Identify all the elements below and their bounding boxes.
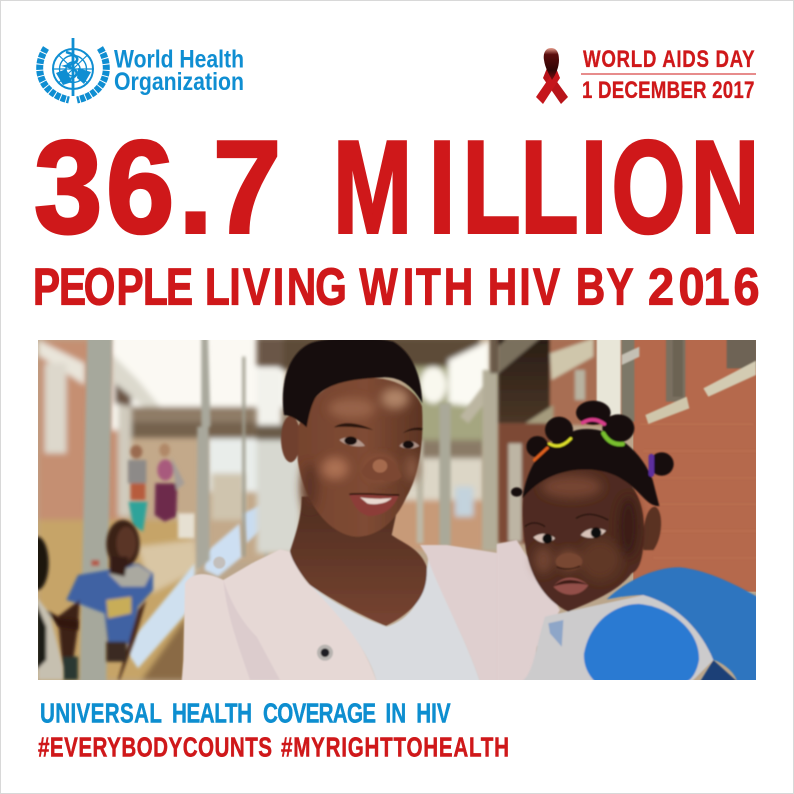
face highlights — [302, 388, 418, 510]
campaign line: UNIVERSAL — [40, 699, 162, 729]
hair puffs — [511, 401, 674, 497]
subheading: PEOPLE LIVING WITH HIV BY — [33, 258, 634, 316]
hair — [523, 429, 659, 506]
organization name: Organization — [114, 68, 244, 96]
face highlights — [534, 475, 638, 580]
neck and chest — [290, 497, 427, 626]
nose — [366, 457, 401, 480]
child — [497, 401, 758, 682]
hair ties — [534, 420, 651, 474]
photo background: left courtyard — [26, 333, 288, 683]
dark fold under hood — [700, 660, 737, 682]
photo background: central passage — [257, 337, 501, 553]
campaign line: HIV — [416, 699, 451, 729]
campaign line — [40, 699, 451, 729]
eyebrows, eyes — [334, 423, 423, 449]
campaign line: IN — [386, 699, 406, 729]
organization name: World Health — [114, 46, 244, 74]
face — [298, 378, 422, 537]
mouth — [349, 494, 398, 516]
face — [523, 463, 644, 612]
jacket: right side — [420, 545, 540, 682]
mother — [182, 338, 540, 682]
organization name — [114, 46, 244, 96]
photo: mother and child — [26, 333, 758, 683]
mother's jacket at child's back — [496, 540, 560, 650]
campaign line: HEALTH — [172, 699, 252, 729]
ear — [281, 416, 300, 462]
headline number: MILLION — [333, 114, 759, 261]
icon: red ribbon — [536, 48, 568, 104]
sweater print — [548, 620, 563, 647]
jacket snaps — [213, 557, 333, 661]
eyes — [525, 514, 608, 544]
jacket: fold details — [225, 588, 278, 680]
event label: World AIDS Day — [581, 46, 756, 104]
blue hood — [607, 567, 758, 682]
hashtags — [38, 733, 509, 763]
blurred boy — [58, 520, 153, 680]
hair — [283, 338, 422, 427]
jacket: left side — [182, 549, 377, 682]
headline number — [34, 114, 759, 261]
shirt — [310, 553, 480, 682]
subheading: 2016 — [648, 258, 760, 316]
photo background: brick building — [498, 338, 757, 592]
grey sweater — [522, 595, 713, 682]
blue sleeve — [584, 604, 699, 682]
nose and mouth — [553, 553, 588, 595]
ear — [643, 507, 661, 550]
hashtags: #MYRIGHTTOHEALTH — [281, 733, 509, 763]
blurred child at left edge — [38, 534, 80, 680]
event label: World AIDS Day: WORLD AIDS DAY — [583, 46, 755, 73]
icon: WHO emblem — [40, 38, 106, 100]
event label: World AIDS Day: 1 DECEMBER 2017 — [582, 77, 754, 104]
campaign line: COVERAGE — [263, 699, 376, 729]
hashtags: #EVERYBODYCOUNTS — [38, 733, 272, 763]
headline number: 36.7 — [34, 114, 281, 261]
